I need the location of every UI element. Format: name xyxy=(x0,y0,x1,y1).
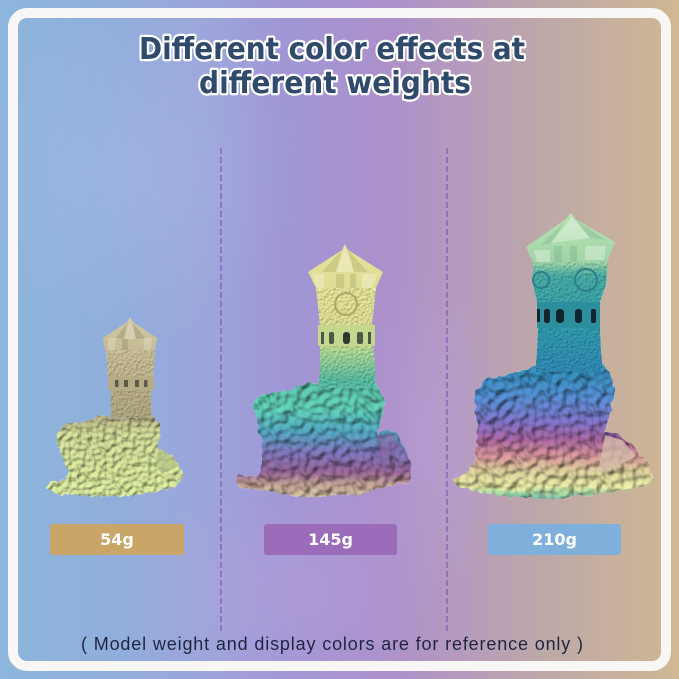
upper body xyxy=(316,288,376,325)
tower shaft xyxy=(535,328,603,372)
weight label 145g: 145g xyxy=(308,530,353,549)
weight label 210g xyxy=(488,524,621,555)
rock base xyxy=(235,380,412,497)
window band xyxy=(537,302,600,328)
stairs xyxy=(155,448,177,472)
dashed divider right xyxy=(446,148,448,632)
tower model 210g xyxy=(452,213,654,498)
stairs xyxy=(598,435,636,472)
weight label 145g xyxy=(264,524,397,555)
upper body xyxy=(106,350,155,377)
weight label 210g: 210g xyxy=(532,530,577,549)
tower shaft xyxy=(318,345,375,388)
dashed divider left xyxy=(220,148,222,632)
windows xyxy=(321,332,371,344)
rock base xyxy=(452,362,654,498)
windows xyxy=(115,380,148,387)
emblems xyxy=(533,269,597,291)
upper body xyxy=(533,262,608,302)
emblem xyxy=(335,293,357,315)
tower model 54g xyxy=(47,317,183,497)
title: Different color effects at xyxy=(139,32,525,67)
windows xyxy=(537,309,596,323)
tower shaft xyxy=(111,388,152,418)
weight label 54g: 54g xyxy=(100,530,134,549)
roof xyxy=(526,213,615,262)
title: different weights xyxy=(199,66,471,101)
window band xyxy=(318,325,375,346)
rock base xyxy=(47,415,183,497)
tower model 145g xyxy=(235,244,412,497)
footnote: ( Model weight and display colors are for reference only ) xyxy=(81,634,583,654)
stairs xyxy=(377,433,402,458)
title xyxy=(139,32,525,101)
window band xyxy=(108,377,154,390)
roof xyxy=(308,244,383,288)
roof xyxy=(103,317,157,350)
weight label 54g xyxy=(50,524,184,555)
